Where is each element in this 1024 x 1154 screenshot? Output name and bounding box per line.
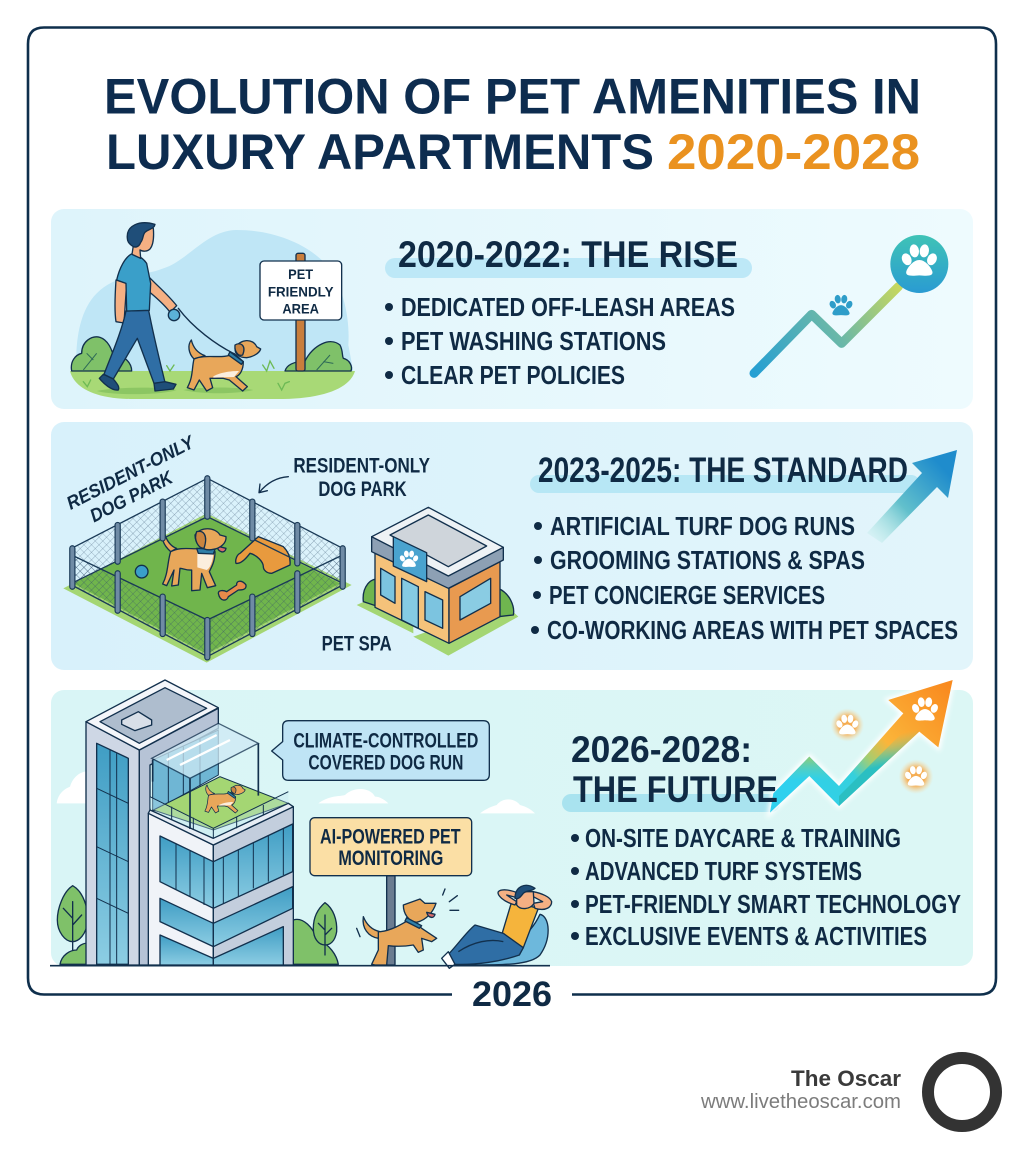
bullet list — [531, 511, 958, 645]
panel: 2023-2025 — [51, 422, 973, 670]
label: resident-only dog park with arrow: RESIDENT-ONLY — [293, 453, 430, 477]
arrow: rising blue — [867, 450, 957, 543]
bullet list: PET WASHING STATIONS — [401, 326, 666, 356]
illustration: tower, rooftop dog run, sign, dog and man: CLIMATE-CONTROLLED — [293, 729, 478, 753]
bullet list: EXCLUSIVE EVENTS & ACTIVITIES — [585, 921, 927, 951]
panel background — [51, 422, 973, 670]
bullet list — [385, 292, 735, 390]
illustration: man walking dog by pet friendly sign — [70, 223, 355, 399]
rising line with paw — [754, 235, 948, 373]
heading — [571, 729, 778, 810]
heading highlight — [562, 794, 780, 812]
panel background — [51, 209, 973, 409]
bullet list: DEDICATED OFF-LEASH AREAS — [401, 292, 735, 322]
bullet list: ON-SITE DAYCARE & TRAINING — [585, 823, 901, 853]
footer brand name: The Oscar — [791, 1066, 901, 1091]
illustration: tower, rooftop dog run, sign, dog and man: AI-POWERED PET — [320, 824, 461, 848]
panel: 2020-2022 — [51, 209, 973, 409]
heading: 2026-2028: — [571, 729, 752, 770]
illustration: fenced dog park — [63, 478, 352, 663]
title — [104, 68, 921, 180]
illustration: man walking dog by pet friendly sign: AREA — [282, 300, 319, 316]
year label: 2026 — [472, 975, 552, 1014]
panel background — [51, 690, 973, 966]
label: resident-only dog park with arrow — [259, 453, 430, 501]
bullet list — [571, 823, 961, 951]
heading: 2023-2025: THE STANDARD — [538, 451, 908, 490]
bullet list: ADVANCED TURF SYSTEMS — [585, 856, 862, 886]
heading: THE FUTURE — [573, 769, 778, 810]
heading highlight — [385, 258, 752, 278]
arrow: rising multicolour — [770, 680, 953, 813]
bullet list: PET CONCIERGE SERVICES — [549, 580, 825, 610]
heading: 2020-2022: THE RISE — [398, 234, 738, 275]
heading highlight — [530, 475, 920, 493]
title: 2020-2028 — [667, 124, 920, 180]
logo ring — [928, 1058, 996, 1126]
panel: 2026-2028 — [50, 680, 973, 968]
label: resident-only dog park, slanted: DOG PARK — [86, 466, 177, 526]
label: pet spa: PET SPA — [322, 632, 392, 656]
illustration: tower, rooftop dog run, sign, dog and man: COVERED DOG RUN — [308, 750, 463, 774]
label: resident-only dog park with arrow: DOG PARK — [318, 477, 407, 501]
bullet list: GROOMING STATIONS & SPAS — [550, 545, 865, 575]
outer frame — [28, 28, 996, 994]
illustration: tower, rooftop dog run, sign, dog and man: MONITORING — [338, 846, 443, 870]
title: EVOLUTION OF PET AMENITIES IN — [104, 68, 921, 124]
title: LUXURY APARTMENTS — [106, 124, 654, 180]
illustration: tower, rooftop dog run, sign, dog and man — [50, 680, 552, 968]
footer url: www.livetheoscar.com — [700, 1091, 901, 1113]
bullet list: CLEAR PET POLICIES — [401, 360, 625, 390]
label: resident-only dog park, slanted: RESIDENT-ONLY — [63, 431, 199, 514]
illustration: man walking dog by pet friendly sign: PET — [288, 266, 314, 282]
illustration: pet spa building — [357, 507, 518, 656]
bullet list: ARTIFICIAL TURF DOG RUNS — [550, 511, 855, 541]
illustration: man walking dog by pet friendly sign: FRIENDLY — [268, 284, 334, 300]
